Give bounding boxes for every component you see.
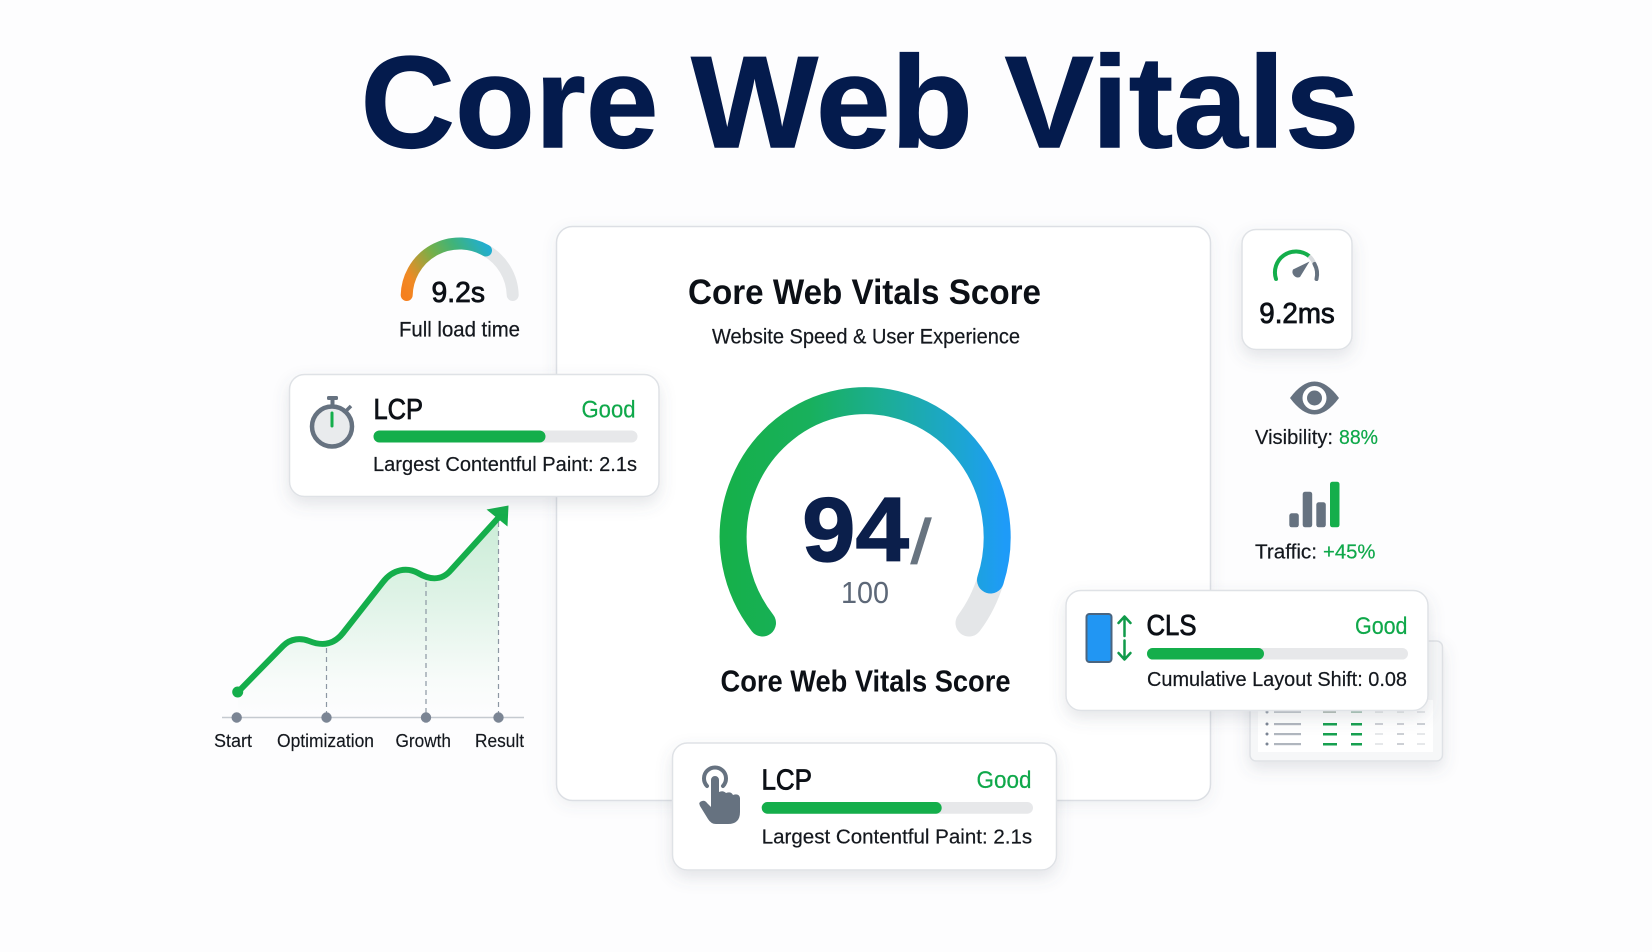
main card subheading: Website Speed & User Experience (712, 325, 1020, 348)
status good: Good (582, 396, 636, 424)
title: Web (691, 28, 973, 175)
visibility stat: 88% (1339, 426, 1378, 449)
chart: growth line (214, 506, 524, 751)
chart axis labels: Start (214, 731, 252, 751)
chart line (238, 516, 500, 692)
progress bar (762, 802, 1033, 814)
panel: main score card (556, 226, 1210, 800)
traffic stat: +45% (1323, 540, 1376, 564)
status good: Good (1355, 613, 1408, 640)
card: speed value (1242, 230, 1352, 350)
visibility stat: Visibility: (1255, 426, 1333, 449)
load time label: Full load time (399, 319, 520, 342)
card: LCP with tap hand (672, 743, 1056, 870)
icon: stopwatch (312, 396, 352, 446)
gauge: main score (733, 401, 997, 623)
progress bar (374, 430, 638, 442)
traffic stat: Traffic: (1255, 540, 1317, 564)
gauge: full load time (399, 244, 520, 342)
chart axis labels: Result (475, 731, 524, 751)
speed value text: 9.2ms (1259, 298, 1335, 330)
score maximum: 100 (841, 575, 889, 610)
title: Vitals (1004, 28, 1360, 175)
LCP label: LCP (374, 394, 423, 426)
score slash: / (911, 508, 932, 577)
gauge caption: Core Web Vitals Score (720, 664, 1010, 699)
title: Core (360, 28, 658, 175)
chart arrowhead (486, 506, 508, 526)
icon: tap hand (699, 767, 740, 824)
card: LCP with stopwatch (290, 374, 659, 496)
LCP label: LCP (762, 764, 812, 796)
card: CLS (1066, 590, 1428, 710)
progress bar (1147, 648, 1408, 660)
CLS label: CLS (1146, 610, 1196, 642)
chart axis labels: Growth (396, 731, 451, 751)
score value: 94 (802, 480, 909, 581)
status good: Good (976, 767, 1032, 794)
panel: data table card behind CLS (1250, 641, 1442, 761)
CLS description: Cumulative Layout Shift: 0.08 (1147, 668, 1407, 691)
LCP description: Largest Contentful Paint: 2.1s (762, 826, 1032, 848)
icon: speedometer (1275, 251, 1317, 279)
chart axis labels (214, 731, 524, 751)
icon: eye (1290, 382, 1339, 414)
load time value: 9.2s (432, 277, 485, 309)
chart area fill (238, 517, 498, 717)
LCP description: Largest Contentful Paint: 2.1s (373, 453, 637, 476)
icon: traffic bars (1289, 482, 1340, 527)
icon: phone with shift arrows (1086, 614, 1130, 662)
main card heading: Core Web Vitals Score (688, 273, 1041, 312)
chart axis labels: Optimization (277, 731, 374, 751)
